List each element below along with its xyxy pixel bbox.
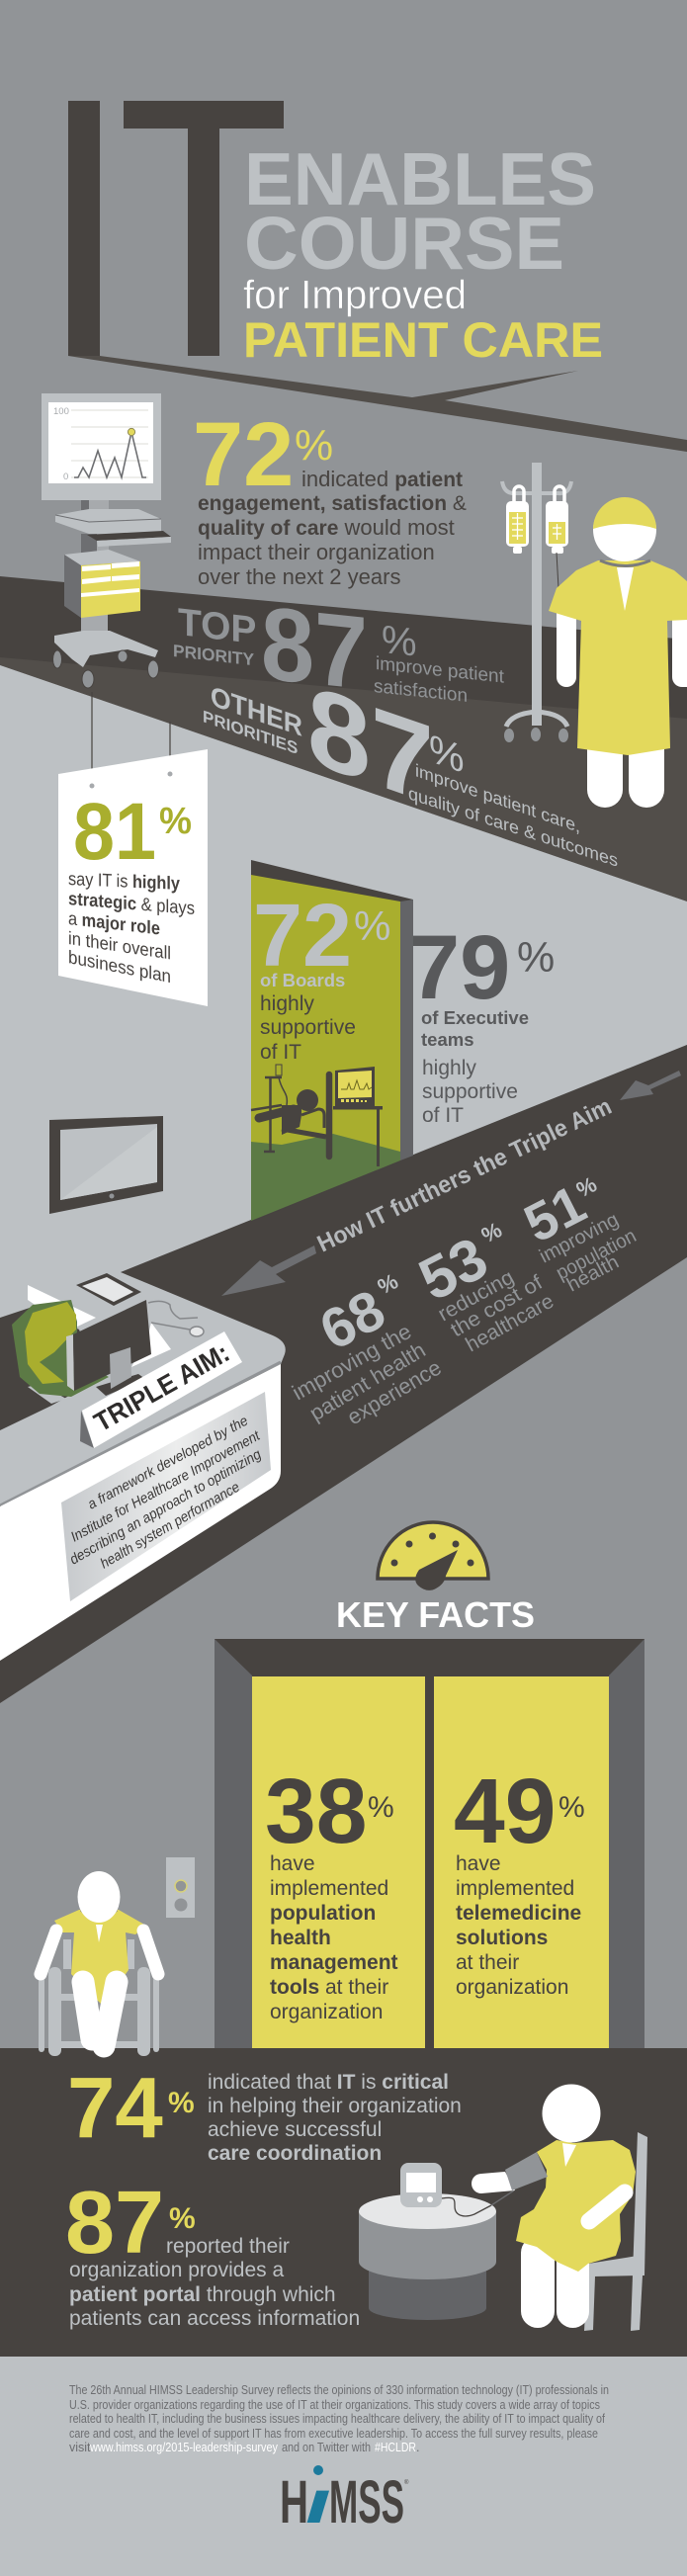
- icon: elevator call panel: [166, 1857, 195, 1918]
- text: survey note: The 26th Annual HIMSS Leadership Survey reflects the opinions of 330 information technology (IT) professionals in: [69, 2383, 609, 2397]
- stat: 87 percent: patients can access information: [69, 2307, 360, 2330]
- stat: 49 percent: implemented: [456, 1877, 574, 1900]
- panel: 81 percent sign: strategic & plays: [68, 888, 195, 918]
- text: top priority 87 percent: PRIORITY: [173, 641, 254, 669]
- icon: patient in wheelchair: [39, 1871, 159, 2056]
- heading: key facts: KEY FACTS: [336, 1594, 535, 1635]
- paper note: definition: health system performance: [98, 1480, 243, 1572]
- stat: 72 percent of boards: of IT: [260, 1041, 301, 1064]
- text: other priorities 87 percent: 87: [307, 660, 434, 828]
- stat: 51 percent: population: [553, 1225, 640, 1284]
- panel: 81 percent sign: 81: [73, 787, 156, 877]
- stat: 79 percent of executive teams: highly: [422, 1057, 476, 1079]
- stat: 87 percent: [65, 2174, 360, 2330]
- stat: 38 percent: implemented: [270, 1877, 388, 1900]
- stat: 49 percent: 49: [454, 1760, 556, 1862]
- text: 72 percent engagement: indicated patient: [301, 467, 463, 491]
- text: 72 percent engagement: %: [295, 421, 333, 470]
- stat: 49 percent: [454, 1760, 585, 1999]
- text: survey note: [69, 2383, 609, 2454]
- stat: 72 percent of boards: highly: [260, 992, 314, 1015]
- stat: 49 percent: at their: [456, 1951, 519, 1974]
- panel: 81 percent sign: business plan: [68, 946, 171, 987]
- stat: 38 percent: organization: [270, 2001, 383, 2023]
- text: other priorities 87 percent: PRIORITIES: [203, 706, 298, 758]
- stat: 53 percent: 53: [408, 1225, 497, 1314]
- icon: standing patient: [549, 497, 687, 808]
- text: survey note: care and cost, and the level of support IT has from executive leadership. To access the full survey results, please: [69, 2427, 598, 2441]
- tent sign: triple aim: TRIPLE AIM:: [89, 1337, 234, 1437]
- stat: 68 percent: experience: [343, 1355, 446, 1429]
- text: 72 percent engagement: 72: [193, 404, 294, 505]
- panel: footer: [0, 2357, 687, 2576]
- text: top priority 87 percent: %: [382, 618, 417, 665]
- panel: elevator: [215, 1639, 644, 2048]
- text: top priority 87 percent: improve patient: [376, 653, 505, 688]
- logo: HIMSS: H: [280, 2468, 308, 2535]
- title: big IT: [68, 101, 284, 356]
- stat: 74 percent: %: [168, 2087, 195, 2119]
- stat: 38 percent: have: [270, 1852, 315, 1875]
- stat: 68 percent: 68: [310, 1278, 394, 1363]
- text: top priority 87 percent: [173, 585, 505, 712]
- title: course: COURSE: [244, 202, 564, 285]
- icon: seated patient: [472, 2084, 647, 2331]
- stat: 74 percent: care coordination: [208, 2142, 382, 2165]
- logo: HIMSS: MSS: [329, 2468, 404, 2535]
- text: survey note: .: [416, 2441, 419, 2454]
- stat: 53 percent: reducing: [434, 1266, 518, 1326]
- stat: 87 percent: patient portal through which: [69, 2283, 336, 2306]
- stat: 68 percent: [288, 1268, 446, 1429]
- paper note: definition: Institute for Healthcare Improvement: [68, 1427, 264, 1545]
- panel: 81 percent sign: a major role: [68, 907, 160, 939]
- panel: 81 percent sign: [58, 749, 208, 1006]
- icon: wall screen: [49, 1116, 163, 1214]
- stat: 38 percent: [265, 1760, 398, 2023]
- stat: 49 percent: organization: [456, 1976, 568, 1999]
- stat: 72 percent of boards: 72: [253, 887, 352, 986]
- text: 72 percent engagement: over the next 2 years: [198, 564, 400, 589]
- icon: computer cart: 100: [53, 406, 69, 417]
- stat: 72 percent of boards: [253, 887, 390, 1064]
- text: other priorities 87 percent: [203, 660, 618, 871]
- stat: 38 percent: %: [368, 1791, 394, 1824]
- icon: gauge: [378, 1522, 488, 1590]
- stat: 79 percent of executive teams: of Executive: [421, 1007, 529, 1028]
- title: enables: ENABLES: [244, 137, 596, 220]
- icon: table with blood pressure monitor: [359, 2163, 514, 2320]
- panel: doorway with boards stat: [251, 860, 413, 1222]
- stat: 79 percent of executive teams: supportive: [422, 1080, 518, 1103]
- logo: HIMSS: ®: [404, 2479, 409, 2486]
- stat: 49 percent: solutions: [456, 1927, 548, 1949]
- text: top priority 87 percent: 87: [261, 585, 368, 712]
- icon: computer cart: [42, 393, 171, 688]
- text: 72 percent engagement: impact their organization: [198, 540, 435, 564]
- stat: 79 percent of executive teams: 79: [409, 917, 510, 1018]
- text: survey note: related to health IT, including the business issues impacting healthcare delivery, the ability of IT to impact quality of: [69, 2412, 605, 2426]
- floor: dark band: [0, 2048, 687, 2357]
- stat: 51 percent: health: [563, 1251, 623, 1296]
- logo: HIMSS: ı: [305, 2468, 331, 2535]
- stat: 68 percent: patient health: [305, 1337, 430, 1425]
- heading: how IT furthers the triple aim: How IT furthers the Triple Aim: [313, 1093, 616, 1257]
- stat: 49 percent: have: [456, 1852, 501, 1875]
- icon: IV stand: [502, 463, 571, 742]
- text: other priorities 87 percent: improve patient care,: [415, 759, 580, 836]
- stat: 72 percent of boards: %: [354, 902, 390, 949]
- stat: 49 percent: telemedicine: [456, 1902, 581, 1925]
- paper note: definition: a framework developed by the: [85, 1414, 251, 1513]
- stat: 38 percent: health: [270, 1927, 331, 1949]
- panel: 81 percent sign: %: [159, 801, 192, 842]
- stat: 51 percent: [515, 1171, 640, 1296]
- stat: 51 percent: 51: [515, 1174, 595, 1254]
- icon: stethoscope: [148, 1301, 204, 1336]
- stat: 38 percent: 38: [265, 1760, 367, 1862]
- text: top priority 87 percent: satisfaction: [374, 676, 468, 707]
- text: other priorities 87 percent: %: [429, 726, 465, 782]
- text: survey note: www.himss.org/2015-leadership-survey: [89, 2441, 279, 2454]
- desk lip: [0, 1362, 281, 1505]
- stat: 38 percent: management: [270, 1951, 398, 1974]
- desk front: [0, 1364, 281, 1661]
- stat: 53 percent: [408, 1217, 558, 1356]
- band: how IT furthers the triple aim: [0, 1045, 687, 1703]
- arrow: large: [221, 1245, 316, 1296]
- stat: 87 percent: %: [169, 2202, 196, 2235]
- stat: 51 percent: %: [572, 1171, 601, 1202]
- floor band: priorities: [0, 576, 687, 902]
- panel: nurse station desk: [0, 1273, 281, 1661]
- panel: light wall with desk top: [0, 665, 687, 1505]
- stat: 74 percent: 74: [67, 2060, 163, 2156]
- stat: 53 percent: healthcare: [462, 1290, 558, 1356]
- paper note: definition: describing an approach to optimizing: [67, 1447, 264, 1568]
- doorway scene: patient in bed with monitor: [251, 1065, 383, 1166]
- text: 72 percent engagement: engagement, satisfaction &: [198, 492, 467, 515]
- stat: 51 percent: improving: [536, 1209, 622, 1267]
- stat: 74 percent: achieve successful: [208, 2118, 382, 2141]
- paper note: definition: [61, 1392, 271, 1601]
- title: for improved: for Improved: [243, 272, 467, 317]
- stat: 87 percent: organization provides a: [69, 2259, 284, 2281]
- stat: 79 percent of executive teams: teams: [421, 1029, 473, 1050]
- stat: 53 percent: the cost of: [447, 1271, 547, 1341]
- title: patient care: PATIENT CARE: [243, 312, 603, 368]
- text: other priorities 87 percent: OTHER: [211, 681, 302, 743]
- logo: HIMSS: [280, 2465, 409, 2535]
- icon: tablet: [76, 1273, 141, 1306]
- title: [68, 101, 603, 368]
- stat: 68 percent: improving the: [288, 1319, 415, 1405]
- stat: 79 percent of executive teams: of IT: [422, 1104, 464, 1127]
- text: 72 percent engagement: [193, 404, 467, 589]
- stat: 38 percent: tools at their: [270, 1976, 388, 1999]
- stat: 38 percent: population: [270, 1902, 376, 1925]
- icon: hanging sign wires: [92, 692, 170, 784]
- stat: 87 percent: 87: [65, 2174, 164, 2273]
- panel: 81 percent sign: say IT is highly: [68, 868, 181, 894]
- text: survey note: and on Twitter with: [282, 2441, 371, 2454]
- stat: 68 percent: %: [374, 1268, 402, 1299]
- stat: 74 percent: [67, 2060, 462, 2165]
- title shadow of IT: [68, 356, 687, 452]
- stat: 79 percent of executive teams: %: [517, 934, 555, 982]
- icon: office chair: [12, 1300, 109, 1404]
- stat: 74 percent: in helping their organization: [208, 2095, 462, 2117]
- panel: 81 percent sign: in their overall: [68, 927, 171, 964]
- text: other priorities 87 percent: quality of care & outcomes: [408, 782, 618, 871]
- stat: 79 percent of executive teams: [409, 917, 555, 1127]
- text: 72 percent engagement: quality of care would most: [198, 515, 455, 540]
- stat: 74 percent: indicated that IT is critical: [208, 2071, 449, 2094]
- stat: 87 percent: reported their: [166, 2235, 290, 2258]
- text: survey note: #HCLDR: [375, 2441, 416, 2454]
- text: top priority 87 percent: TOP: [178, 601, 256, 652]
- stat: 72 percent of boards: supportive: [260, 1016, 356, 1039]
- stat: 72 percent of boards: of Boards: [260, 970, 345, 990]
- icon: computer cart: 0: [63, 472, 68, 482]
- stat: 49 percent: %: [558, 1791, 585, 1824]
- icon: desk monitor: [66, 1300, 151, 1396]
- stat: 53 percent: %: [477, 1217, 506, 1247]
- text: survey note: U.S. provider organizations regarding the use of IT at their organizations. This study covers a wide array of topics: [69, 2398, 600, 2412]
- arrow: small: [620, 1071, 681, 1100]
- text: survey note: visit: [69, 2441, 91, 2454]
